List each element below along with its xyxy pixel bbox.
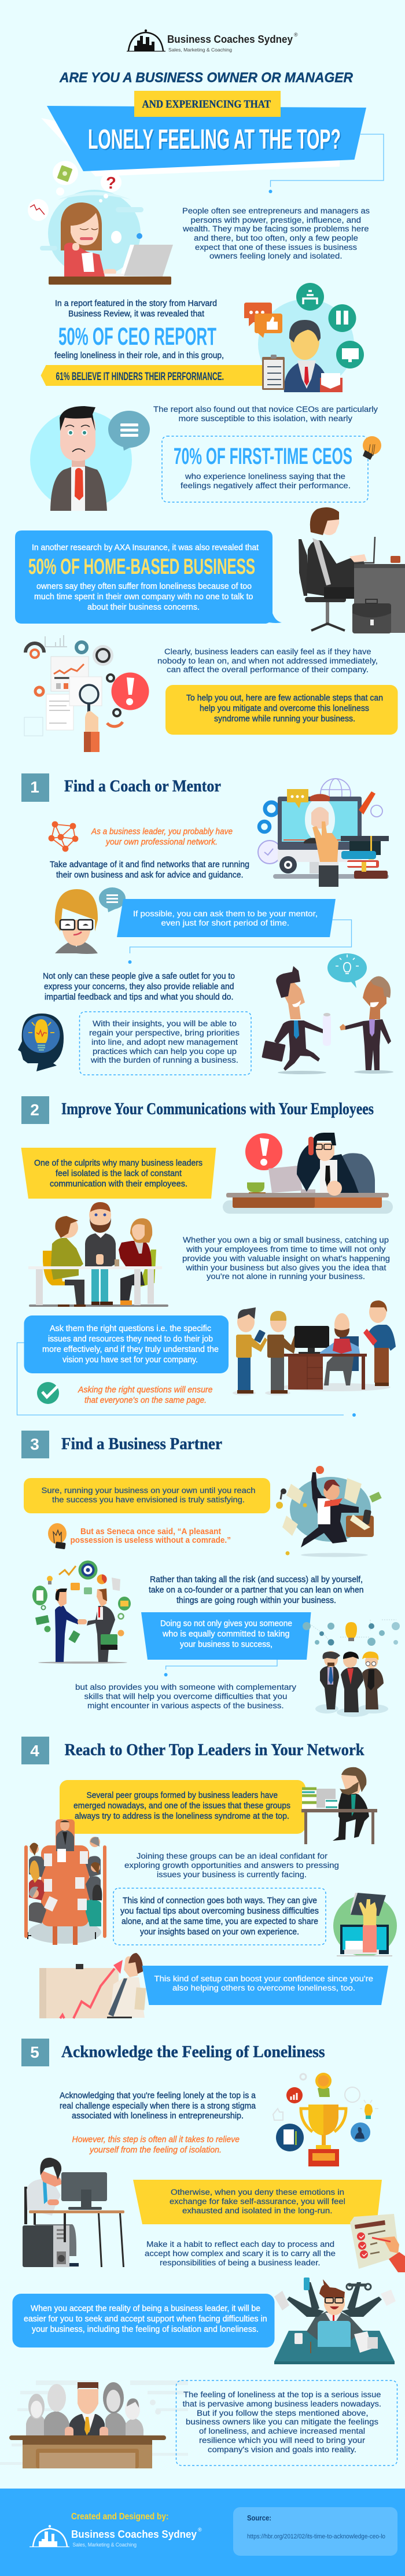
illustration: handshake with business icons xyxy=(32,1561,131,1664)
ideal confidant text: issues your business is currently facing. xyxy=(157,1870,307,1879)
illustration: man working at desk xyxy=(299,507,405,633)
yellow tag: 61%: 61% BELIEVE IT HINDERS THEIR PERFORMANCE. xyxy=(56,370,224,383)
employees paragraph xyxy=(182,1236,390,1281)
dashed callout: insights: practices which can help you cope up xyxy=(93,1047,237,1056)
section 4 heading: 4 xyxy=(30,1742,39,1760)
novice CEOs text xyxy=(153,405,378,423)
orange quote from Seneca: But as Seneca once said, “A pleasant xyxy=(80,1527,221,1536)
co-founder text xyxy=(149,1575,363,1605)
section 3 heading: 3 xyxy=(30,1435,39,1453)
dashed callout: insights xyxy=(80,1012,251,1075)
orange highlight: relieve isolation: However, this step is often all it takes to relieve xyxy=(72,2135,240,2144)
yellow panel: deny emotions: exhausted and isolated in the long-run. xyxy=(182,2206,332,2215)
reflect text xyxy=(145,2240,336,2267)
orange highlight: professional network xyxy=(91,827,233,847)
dashed callout: both ways: your insights based on your own experience. xyxy=(140,1927,299,1937)
panel: actionable steps xyxy=(165,685,398,735)
dashed callout: insights: regain your perspective, bring priorities xyxy=(89,1029,240,1037)
employees paragraph: with your employees from time to time will not only xyxy=(186,1245,386,1254)
orange quote from Seneca xyxy=(71,1527,231,1545)
intro paragraph: People often see entrepreneurs and managers as xyxy=(182,207,370,215)
illustration: bearded man at desk xyxy=(301,1767,377,1844)
blue panel: committed xyxy=(141,1612,311,1660)
clearly paragraph: Clearly, business leaders can easily feel as if they have xyxy=(164,647,371,656)
section 5 heading: 5 xyxy=(30,2043,39,2061)
novice CEOs text: The report also found out that novice CEOs are particularly xyxy=(153,405,378,414)
yellow panel: peer groups: emerged nowadays, and one of the issues that these groups xyxy=(73,1801,290,1811)
employees paragraph: within your business but also gives you the idea that xyxy=(185,1263,386,1272)
blue panel: right questions: issues and resources they need to do their job xyxy=(48,1334,213,1344)
orange highlight: same page: that everyone's on the same page. xyxy=(84,1395,207,1405)
connector below questions panel xyxy=(17,1343,356,1417)
section 5 heading: Acknowledge the Feeling of Loneliness xyxy=(61,2043,325,2061)
yellow panel: culprits xyxy=(21,1148,216,1199)
connector from mentor callout xyxy=(128,920,352,964)
illustration: executive with icons xyxy=(244,283,364,392)
title banner xyxy=(41,106,366,176)
ideal confidant text xyxy=(124,1852,339,1879)
orange highlight: same page xyxy=(78,1385,213,1405)
title line: ARE YOU A BUSINESS OWNER OR MANAGER xyxy=(59,70,354,86)
illustration: three colleagues at table xyxy=(28,1202,168,1307)
complementary skills text: but also provides you with someone with complementary xyxy=(75,1683,296,1691)
illustration: trophy with achievement icons xyxy=(273,2073,378,2166)
illustration: multitasking man with many arms xyxy=(274,2278,396,2364)
panel: AXA research: owners say they often suffer from loneliness because of too xyxy=(36,581,252,591)
orange highlight: same page: Asking the right questions will ensure xyxy=(78,1385,213,1395)
yellow panel: running your business: Sure, running your business on your own until you reach xyxy=(42,1486,256,1495)
networks text: their own business and ask for advice and guidance. xyxy=(56,870,243,880)
blue panel: accept reality: easier for you to seek and accept support when facing difficulties in xyxy=(24,2314,267,2324)
intro paragraph: expect that one of these issues is business xyxy=(195,243,357,252)
clearly paragraph xyxy=(157,647,378,674)
orange highlight: relieve isolation: yourself from the feeling of isolation. xyxy=(89,2145,222,2155)
orange highlight: relieve isolation xyxy=(72,2135,240,2155)
dashed callout: both ways: you factual tips about overcoming business difficulties xyxy=(120,1906,319,1916)
intro paragraph: owners feeling lonely and isolated. xyxy=(209,252,343,260)
footer band xyxy=(0,2488,405,2576)
illustration: leader at podium with team xyxy=(9,2382,166,2468)
co-founder text: take on a co-founder or a partner that you can lean on when xyxy=(149,1585,363,1595)
reflect text: Make it a habit to reflect each day to process and xyxy=(146,2240,334,2249)
blue panel: accept reality xyxy=(13,2294,274,2347)
icon: green check xyxy=(37,1382,59,1404)
yellow panel: culprits: feel isolated is the lack of constant xyxy=(56,1169,182,1178)
blue panel: boost confidence xyxy=(142,1966,388,2005)
illustration: analytics and warning xyxy=(24,635,149,752)
Harvard report text: Business Review, it was revealed that xyxy=(68,309,205,319)
dashed callout: both ways: alone, and at the same time, you are expected to share xyxy=(122,1917,318,1926)
dashed callout: conclusion: business owners like you can mitigate the feelings xyxy=(186,2417,378,2426)
blue panel: accept reality: your business, including the feeling of isolation and loneliness. xyxy=(32,2324,259,2334)
ideal confidant text: exploring growth opportunities and answers to pressing xyxy=(124,1861,339,1870)
icon: light bulb xyxy=(363,436,381,460)
dashed callout: conclusion xyxy=(176,2380,397,2466)
yellow panel: deny emotions xyxy=(133,2180,382,2224)
dashed callout: conclusion: company's vision and goals into reality. xyxy=(208,2445,356,2454)
dashed callout: 70% of first-time CEOs: feelings negatively affect their performance. xyxy=(181,481,351,490)
connector from banner xyxy=(268,134,384,193)
blue panel: right questions xyxy=(24,1315,229,1373)
Harvard report text: feeling loneliness in their role, and in this group, xyxy=(54,351,224,360)
illustration: man and growth chart xyxy=(39,1953,146,2018)
Harvard report text: 50% OF CEO REPORT xyxy=(58,323,216,351)
yellow panel: deny emotions: exchange for fake self-assurance, you will feel xyxy=(170,2197,345,2206)
footer credit and logo: Created and Designed by: xyxy=(71,2512,169,2522)
yellow subtitle tag: AND EXPERIENCING THAT xyxy=(142,98,271,110)
illustration: lonely woman at laptop xyxy=(28,161,173,285)
blue panel: boost confidence: also helping others to overcome loneliness, too. xyxy=(172,1984,355,1992)
dashed callout: conclusion: that is pervasive among business leaders nowadays. xyxy=(183,2400,381,2408)
section 2 heading: 2 xyxy=(30,1101,39,1119)
illustration: hand with book and laptop xyxy=(333,1893,397,1956)
dashed callout: 70% of first-time CEOs xyxy=(162,436,368,502)
footer credit and logo: ® xyxy=(198,2527,202,2533)
illustration: jumping businessman xyxy=(276,1466,382,1557)
source box: https://hbr.org/2012/02/its-time-to-acknowledge-ceo-lo xyxy=(247,2533,385,2540)
employees paragraph: provide you with valuable insight on what's happening xyxy=(182,1254,390,1263)
yellow panel: culprits: communication with their employees. xyxy=(50,1179,187,1189)
employees paragraph: you're not alone in running your business. xyxy=(207,1272,365,1281)
co-founder text: Rather than taking all the risk (and success) all by yourself, xyxy=(150,1575,363,1584)
yellow panel: culprits: One of the culprits why many business leaders xyxy=(34,1158,203,1168)
panel: AXA research xyxy=(15,530,282,624)
panel: AXA research: much time spent in their own company with no one to talk to xyxy=(34,592,253,602)
section 3 heading: Find a Business Partner xyxy=(61,1435,222,1453)
icon: head with light bulb xyxy=(18,1014,64,1071)
illustration: online mentoring monitor xyxy=(258,779,389,887)
illustration: checklist and hand xyxy=(350,2214,405,2272)
dashed callout: insights: With their insights, you will be able to xyxy=(93,1019,237,1028)
yellow subtitle tag xyxy=(134,91,281,117)
complementary skills text: might encounter in various aspects of the business. xyxy=(87,1701,284,1710)
logo: Business Coaches Sydney: Business Coaches Sydney xyxy=(167,34,293,45)
Harvard report text xyxy=(54,298,224,360)
panel: AXA research: 50% OF HOME-BASED BUSINESS xyxy=(28,555,255,579)
networks text xyxy=(50,860,249,880)
orange highlight: professional network: As a business leader, you probably have xyxy=(91,827,233,836)
co-founder text: things are going rough within your business. xyxy=(176,1595,336,1605)
acknowledging text: Acknowledging that you're feeling lonely at the top is a xyxy=(60,2091,256,2100)
complementary skills text: skills that will help you overcome difficulties that you xyxy=(84,1692,287,1701)
complementary skills text xyxy=(75,1683,296,1710)
clearly paragraph: nobody to lean on, and when not addressed immediately, xyxy=(157,657,378,665)
footer credit and logo: Business Coaches Sydney xyxy=(71,2529,197,2540)
dashed callout: 70% of first-time CEOs: who experience loneliness saying that the xyxy=(185,472,345,481)
illustration: three partners and idea network xyxy=(303,1620,400,1717)
blue panel: right questions: more effectively, and if they truly understand the xyxy=(42,1344,219,1354)
dashed callout: both ways: This kind of connection goes both ways. They can give xyxy=(123,1896,317,1906)
section 1 heading xyxy=(21,773,221,802)
blue panel: right questions: vision you have set for your company. xyxy=(62,1355,198,1365)
safe outlet text: impartial feedback and tips and what you should do. xyxy=(45,992,234,1002)
yellow panel: peer groups xyxy=(60,1780,305,1834)
blue callout: mentor: even just for short period of time. xyxy=(161,919,289,927)
intro paragraph: persons with power, prestige, influence, and xyxy=(191,216,361,224)
dashed callout: conclusion: The feeling of loneliness at the top is a serious issue xyxy=(183,2390,381,2399)
panel: actionable steps: syndrome while running your business. xyxy=(214,714,355,724)
orange highlight: professional network: your own professional network. xyxy=(105,837,218,847)
safe outlet text xyxy=(43,971,235,1002)
footer credit and logo: Sales, Marketing & Coaching xyxy=(73,2542,137,2548)
illustration: two businessmen shaking hands xyxy=(262,953,393,1074)
reflect text: accept how complex and scary it is to carry all the xyxy=(145,2249,336,2258)
logo: Business Coaches Sydney: ® xyxy=(294,32,298,38)
panel: actionable steps: To help you out, here are few actionable steps that can xyxy=(186,693,383,703)
source box: Source: xyxy=(247,2514,271,2522)
ideal confidant text: Joining these groups can be an ideal confidant for xyxy=(137,1852,328,1860)
blue panel: committed: Doing so not only gives you someone xyxy=(160,1619,292,1628)
acknowledging text: associated with loneliness in entrepreneurship. xyxy=(72,2111,244,2121)
logo: Business Coaches Sydney xyxy=(127,30,298,53)
blue panel: accept reality: When you accept the reality of being a business leader, it will be xyxy=(31,2304,260,2313)
illustration: boardroom meeting xyxy=(24,1819,106,1945)
blue callout: mentor xyxy=(117,899,336,937)
panel: AXA research: about their business concerns. xyxy=(87,602,200,612)
illustration: stressed man on phone xyxy=(223,1133,393,1214)
illustration: woman with glasses and speech icon xyxy=(55,887,126,954)
illustration: team at office desk xyxy=(233,1300,396,1395)
blue callout: mentor: If possible, you can ask them to be your mentor, xyxy=(133,909,318,918)
illustration: worried man with speech bubble xyxy=(30,406,150,511)
safe outlet text: express your concerns, they also provide reliable and xyxy=(44,982,234,992)
blue panel: committed: who is equally committed to taking xyxy=(162,1629,289,1639)
acknowledging text xyxy=(60,2091,256,2121)
section 2 heading xyxy=(21,1096,374,1124)
section 4 heading: Reach to Other Top Leaders in Your Network xyxy=(65,1741,365,1759)
acknowledging text: real challenge especially when there is a strong stigma xyxy=(60,2101,256,2111)
dashed callout: insights: with the burden of running a business. xyxy=(90,1056,238,1064)
illustration: exhausted man at computer xyxy=(23,2158,124,2267)
yellow panel: deny emotions: Otherwise, when you deny these emotions in xyxy=(171,2188,344,2197)
Harvard report text: In a report featured in the story from Harvard xyxy=(55,298,217,308)
dashed callout: insights: into line, and adopt new management xyxy=(91,1038,238,1046)
panel: faded background lines behind leaders xyxy=(0,2380,188,2465)
blue panel: right questions: Ask them the right questions i.e. the specific xyxy=(50,1324,211,1333)
dashed callout: conclusion: But if you follow the steps mentioned above, xyxy=(197,2409,369,2417)
section 1 heading: Find a Coach or Mentor xyxy=(64,777,221,795)
section 4 heading xyxy=(21,1737,365,1764)
dashed callout: conclusion: resilience which you will need to bring your xyxy=(199,2436,366,2445)
blue panel: committed: your business to success, xyxy=(180,1639,273,1649)
employees paragraph: Whether you own a big or small business, catching up xyxy=(183,1236,389,1244)
safe outlet text: Not only can these people give a safe outlet for you to xyxy=(43,971,235,981)
panel: actionable steps: help you mitigate and overcome this loneliness xyxy=(200,703,369,713)
blue panel: boost confidence: This kind of setup can boost your confidence since you're xyxy=(154,1974,373,1983)
reflect text: responsibilities of being a business leader. xyxy=(160,2258,321,2267)
yellow panel: peer groups: Several peer groups formed by business leaders have xyxy=(87,1790,278,1800)
illustration: lonely woman at laptop: ? xyxy=(106,174,116,193)
dashed callout: conclusion: of loneliness, and achieve increased mental xyxy=(199,2427,365,2435)
yellow panel: running your business: the success you have envisioned is truly satisfying. xyxy=(52,1495,245,1504)
intro paragraph xyxy=(182,207,370,260)
source box xyxy=(233,2507,397,2556)
yellow panel: peer groups: always try to address is the loneliness syndrome at the top. xyxy=(75,1811,289,1821)
icon: orange network xyxy=(49,821,78,852)
icon: orange bulb xyxy=(48,1523,67,1549)
panel: AXA research: In another research by AXA Insurance, it was also revealed that xyxy=(32,543,259,552)
connector from commitment panel xyxy=(164,1660,277,1676)
networks text: Take advantage of it and find networks that are running xyxy=(50,860,249,869)
novice CEOs text: more susceptible to this isolation, with nearly xyxy=(178,414,352,423)
intro paragraph: and there, but too often, only a few people xyxy=(194,234,358,242)
section 3 heading xyxy=(21,1431,222,1458)
footer credit and logo xyxy=(30,2512,202,2548)
dashed callout: both ways xyxy=(113,1888,326,1945)
yellow panel: running your business xyxy=(24,1478,270,1513)
orange quote from Seneca: possession is useless without a comrade.” xyxy=(71,1535,231,1545)
intro paragraph: wealth. They may be facing some problems here xyxy=(182,224,369,233)
logo: Business Coaches Sydney: Sales, Marketing & Coaching xyxy=(168,47,232,53)
clearly paragraph: can affect the overall performance of their company. xyxy=(167,665,369,674)
yellow tag: 61% xyxy=(41,365,263,386)
section 5 heading xyxy=(21,2039,325,2066)
section 1 heading: 1 xyxy=(30,778,39,796)
